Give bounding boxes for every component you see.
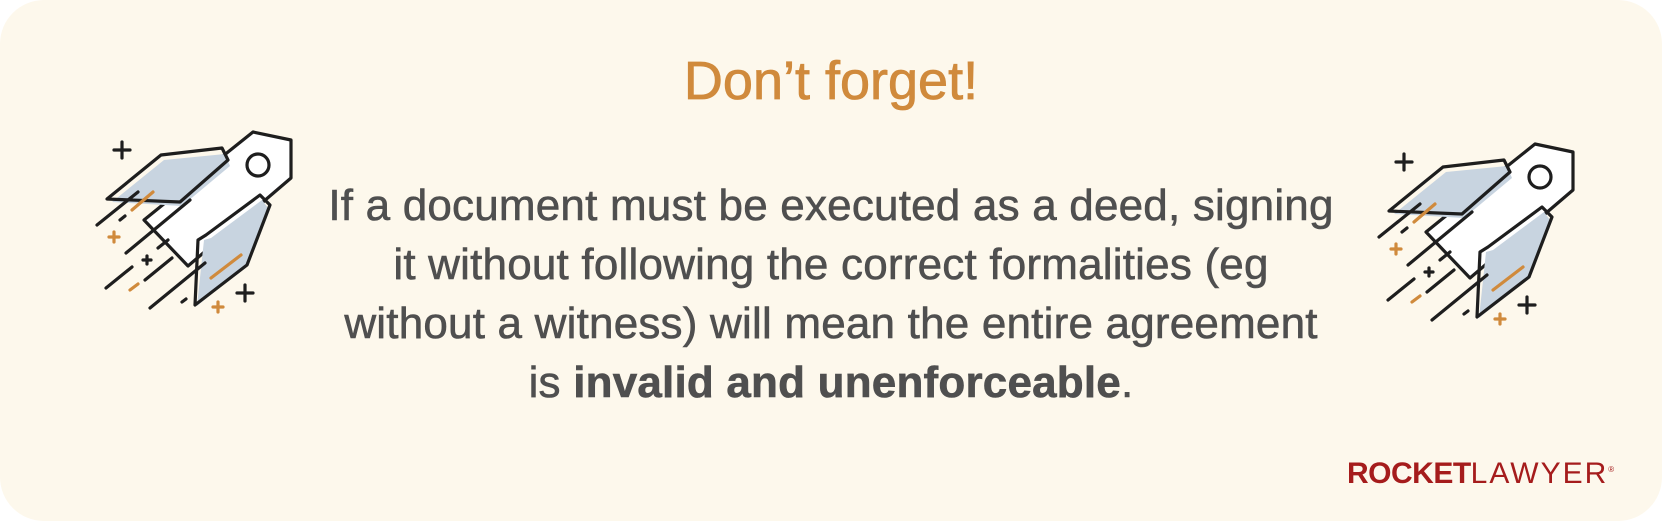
text block: main message: it without following the correct formalities (eg xyxy=(393,240,1269,289)
text block: main message: without a witness) will mean the entire agreement xyxy=(344,299,1318,348)
text block: main message: is invalid and unenforceable. xyxy=(529,358,1133,407)
title: Don’t forget! xyxy=(684,51,978,111)
text block: main message xyxy=(328,181,1334,407)
icon: rocket right xyxy=(1377,142,1575,326)
text block: main message: If a document must be executed as a deed, signing xyxy=(328,181,1334,230)
logo: Rocket Lawyer: ROCKETLAWYER® xyxy=(1347,457,1615,490)
icon: rocket left xyxy=(95,130,293,314)
